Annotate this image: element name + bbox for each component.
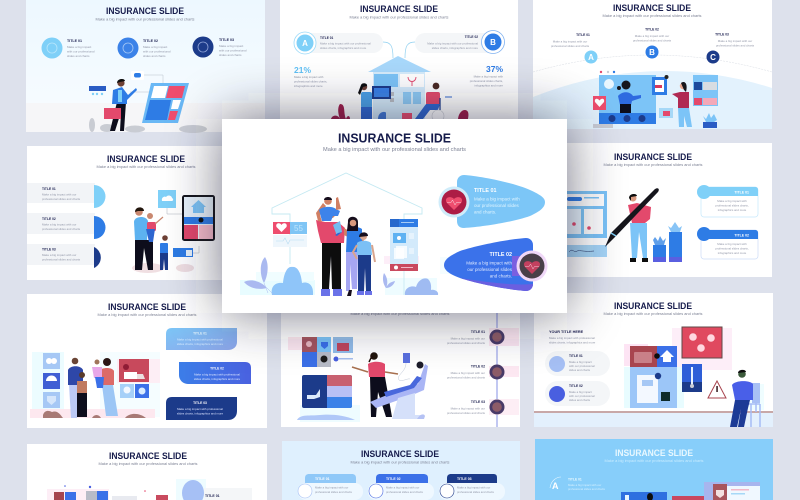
column 3: TITLE 03 — [457, 477, 472, 481]
tab 2: Make a big impact with our — [42, 222, 76, 226]
slide: bottom left, partial: INSURANCE SLIDE — [109, 451, 188, 462]
callout A — [294, 32, 383, 54]
tab 3 — [27, 244, 101, 268]
callout A: A — [302, 39, 308, 48]
slide: bottom right, partial: INSURANCE SLIDE — [615, 448, 694, 459]
item 1 — [42, 38, 95, 58]
marker B: B — [649, 48, 655, 57]
timeline — [489, 300, 519, 427]
marker A: professional slides and charts — [551, 44, 590, 48]
item 1: professional slides and charts — [447, 341, 486, 345]
illustration: patient and nurse — [288, 337, 428, 422]
item 3 — [192, 36, 247, 58]
marker A: A — [552, 481, 559, 491]
callout: title 02: and charts. — [490, 274, 512, 278]
callout: title 02: our professional slides — [467, 267, 513, 272]
slide: bottom centre, partial — [282, 441, 520, 500]
stat 37%: Make a big impact with — [474, 74, 503, 78]
tab 3: TITLE 03 — [42, 248, 56, 252]
house outline — [272, 173, 422, 264]
pill 3: TITLE 03 — [193, 401, 207, 405]
pill 3: Make a big impact with professional — [177, 407, 223, 411]
item 2: professional slides and charts — [447, 376, 486, 380]
item 2: with our professional — [569, 394, 595, 398]
slide: top left, three circles: INSURANCE SLIDE — [106, 6, 185, 17]
callout B — [415, 30, 504, 54]
slide: top centre, A and B with house: Make a big impact with our professional slides and charts — [350, 14, 449, 20]
callout: title 01: and charts. — [474, 210, 496, 214]
callout: title 02: Make a big impact with — [466, 260, 512, 266]
stat 21%: 21% — [294, 65, 311, 75]
item 2: TITLE 02 — [471, 364, 485, 368]
pill 3: slides charts, infographics and more — [177, 412, 224, 416]
marker A: professional slides and charts — [568, 487, 605, 491]
slide: middle left, three tabs: Make a big impact with our professional slides and charts — [96, 164, 196, 169]
callout: title 01: Make a big impact with — [474, 196, 520, 202]
item 2 — [447, 364, 486, 380]
column 1: professional slides and charts — [315, 490, 352, 494]
callout: title 02 — [444, 238, 548, 291]
callout B: slides charts, infographics and more — [432, 46, 478, 50]
card 2: infographics and more — [718, 251, 747, 255]
marker C: professional slides and charts — [716, 44, 755, 48]
item: TITLE 01 — [205, 494, 220, 498]
item 3: with our professional — [219, 48, 247, 52]
item 2: slides and charts — [143, 54, 166, 58]
tab 3: Make a big impact with our — [42, 253, 76, 257]
stat 21% — [294, 65, 327, 88]
item 3: TITLE 03 — [471, 400, 485, 404]
callout A: Make a big impact with our professional — [320, 42, 371, 46]
tab 3: professional slides and charts — [42, 258, 81, 262]
stat 37%: 37% — [486, 64, 503, 74]
item 1: TITLE 01 — [471, 330, 485, 334]
slide: lower right, your title here: INSURANCE SLIDE — [614, 301, 693, 312]
item 1: slides and charts — [569, 368, 591, 372]
slide: bottom right, partial: Make a big impact with our professional slides and charts — [604, 458, 704, 463]
card 1 — [697, 185, 758, 217]
intro text: slides charts, infographics and more — [549, 340, 596, 344]
centre slide: insurance family — [222, 119, 567, 313]
marker A — [550, 477, 605, 491]
item 1: TITLE 01 — [569, 354, 583, 358]
callout B: B — [490, 38, 496, 47]
item 2: Make a big impact with our — [451, 371, 485, 375]
heart rate card — [273, 222, 307, 247]
column 3 — [439, 474, 505, 500]
illustration: virus monitor and patient — [624, 327, 764, 427]
slide: top right, A B C arc: INSURANCE SLIDE — [613, 3, 692, 14]
item 1: Make a big impact — [569, 360, 592, 364]
item 2: TITLE 02 — [569, 384, 583, 388]
column 2: professional slides and charts — [386, 490, 423, 494]
illustration: family with tablet — [132, 190, 215, 273]
column 2: Make a big impact with our — [386, 486, 419, 490]
callout: title 01: TITLE 01 — [474, 188, 496, 194]
marker A: Make a big impact with our — [553, 40, 587, 44]
marker A: A — [588, 53, 594, 62]
illustration: screen and shield — [621, 482, 760, 500]
illustration: family — [316, 197, 375, 296]
item 3: slides and charts — [219, 53, 242, 57]
callout: title 01: our professional slides — [474, 203, 520, 208]
item 2: with our professional — [143, 50, 171, 54]
tab 1: Make a big impact with our — [42, 192, 76, 196]
stat 21%: infographics and more — [294, 84, 323, 88]
card 2 — [697, 227, 758, 259]
slide: bottom right, partial — [535, 439, 773, 500]
item 1: with our professional — [67, 50, 95, 54]
column 2 — [368, 474, 434, 500]
item 2: TITLE 02 — [143, 39, 158, 43]
callout A: TITLE 01 — [320, 36, 334, 40]
slide: middle right, pen and bars: Make a big impact with our professional slides and charts — [604, 162, 703, 167]
slide: middle left, three tabs: INSURANCE SLIDE — [107, 154, 186, 165]
centre slide shadow — [222, 119, 567, 313]
column 3: Make a big impact with our — [457, 486, 490, 490]
pill 1: slides charts, infographics and more — [177, 342, 224, 346]
illustration: document and pen — [567, 188, 682, 262]
column 2: TITLE 02 — [386, 477, 401, 481]
illustration: online consultation — [593, 71, 718, 128]
card 1: Make a big impact with — [717, 199, 747, 203]
item 3 — [447, 400, 486, 415]
callout: title 01 — [438, 175, 545, 228]
item 2: Make a big impact — [569, 390, 592, 394]
pill 2: slides charts, infographics and more — [194, 377, 241, 381]
marker B — [633, 28, 672, 58]
stat 37% — [470, 64, 503, 88]
item 2 — [118, 38, 171, 58]
marker A: Make a big impact with our — [568, 483, 601, 487]
child on shoulders — [319, 197, 342, 236]
plants — [244, 257, 438, 295]
chroma tint behind plants — [240, 256, 543, 295]
slide: lower right, your title here — [534, 293, 773, 427]
intro text: Make a big impact with professional — [549, 336, 595, 340]
pill 1: TITLE 01 — [193, 332, 207, 336]
slide: top left, three circles — [26, 0, 265, 133]
slide: lower right, your title here: Make a big impact with our professional slides and charts — [604, 311, 703, 316]
illustration: family with insurance icons — [30, 352, 160, 418]
item 2: Make a big impact — [143, 45, 168, 49]
tab 2: TITLE 02 — [42, 217, 56, 221]
father — [316, 203, 364, 296]
slide: bottom left, partial — [27, 444, 267, 500]
slide: top centre, A and B with house — [280, 0, 518, 122]
item 3: Make a big impact — [219, 44, 244, 48]
pill 2 — [179, 362, 251, 384]
pill 2: Make a big impact with professional — [194, 372, 240, 376]
slide: lower left, three pills: INSURANCE SLIDE — [108, 302, 187, 313]
slide: lower centre, patient chair: Make a big impact with our professional slides and charts — [350, 311, 450, 316]
item 1: slides and charts — [67, 54, 90, 58]
child — [353, 232, 375, 295]
slide: middle left, three tabs — [27, 146, 265, 280]
item 3: professional slides and charts — [447, 411, 486, 415]
column 1 — [298, 474, 363, 500]
card 2: TITLE 02 — [734, 234, 749, 238]
item 1: Make a big impact with our — [451, 336, 485, 340]
marker C: TITLE 03 — [715, 32, 729, 36]
marker C: Make a big impact with our — [718, 39, 752, 43]
slide: middle right, pen and bars: INSURANCE SLIDE — [614, 152, 693, 163]
slide: top left, three circles: Make a big impact with our professional slides and charts — [96, 16, 195, 22]
illustration: businessman with tablet — [89, 71, 207, 133]
card 2: professional slides charts, — [715, 246, 749, 250]
stat 21%: professional slides charts, — [294, 80, 327, 84]
slide: bottom centre, partial: Make a big impact with our professional slides and charts — [350, 460, 450, 464]
pill 1 — [166, 328, 237, 350]
slide: top centre, A and B with house: INSURANCE SLIDE — [360, 4, 439, 15]
callout A: slides charts, infographics and more — [320, 46, 367, 50]
tab 2: professional slides and charts — [42, 227, 81, 231]
stat 37%: infographics and more — [474, 84, 503, 88]
pill 1: Make a big impact with professional — [177, 338, 223, 342]
tab 1: TITLE 01 — [42, 187, 56, 191]
marker A: TITLE 01 — [576, 33, 590, 37]
item 1 — [447, 330, 486, 345]
marker C — [706, 32, 755, 64]
card 2: Make a big impact with — [717, 242, 747, 246]
callout: title 02: TITLE 02 — [490, 252, 512, 258]
illustration: icons and hand — [47, 479, 252, 500]
pill 3 — [166, 397, 237, 420]
slide: lower centre, patient chair — [281, 300, 520, 427]
slide: top right, A B C arc: Make a big impact with our professional slides and charts — [602, 13, 702, 18]
tab 1 — [27, 183, 106, 208]
marker B: TITLE 02 — [645, 28, 659, 32]
intro text: YOUR TITLE HERE — [549, 330, 584, 334]
tab 1: professional slides and charts — [42, 197, 81, 201]
stat 37%: professional slides charts, — [470, 79, 503, 83]
marker A: TITLE 01 — [568, 478, 582, 482]
slide: lower left, three pills: Make a big impact with our professional slides and charts — [98, 312, 197, 317]
slide: bottom left, partial: Make a big impact with our professional slides and charts — [98, 461, 198, 466]
slide: middle right, pen and bars — [527, 143, 772, 277]
item 2: slides and charts — [569, 398, 591, 402]
column 1: TITLE 01 — [315, 477, 330, 481]
slide: top right, A B C arc — [533, 0, 772, 129]
item 3: Make a big impact with our — [451, 406, 485, 410]
connectors — [383, 42, 415, 58]
card 1: infographics and more — [718, 208, 747, 212]
card 1: professional slides charts, — [715, 204, 749, 208]
item 1: Make a big impact — [67, 45, 92, 49]
marker A — [551, 33, 598, 64]
illustration: clinic house — [331, 56, 468, 122]
callout B: TITLE 02 — [465, 35, 478, 39]
slide: bottom centre, partial: INSURANCE SLIDE — [361, 449, 440, 460]
pill 2: TITLE 02 — [210, 366, 224, 370]
item 1: with our professional — [569, 364, 595, 368]
icon: tablet — [390, 219, 418, 295]
marker C: C — [710, 53, 716, 62]
intro text — [549, 330, 596, 344]
heart rate card: 55 — [294, 224, 303, 233]
item 1: TITLE 01 — [67, 39, 82, 43]
item 3: TITLE 03 — [219, 38, 234, 42]
subtitle: Make a big impact with our professional slides and charts — [323, 147, 466, 153]
callout B: Make a big impact with our professional — [427, 42, 478, 46]
title: INSURANCE SLIDE — [338, 130, 451, 146]
card 1: TITLE 01 — [734, 190, 749, 194]
marker B: Make a big impact with our — [635, 34, 669, 38]
item 1 — [545, 351, 610, 376]
slide: lower left, three pills — [27, 294, 267, 428]
item 2 — [545, 381, 610, 406]
column 3: professional slides and charts — [457, 490, 494, 494]
mother — [346, 217, 362, 296]
tab 2 — [27, 213, 106, 239]
stat 21%: Make a big impact with — [294, 75, 324, 79]
marker B: professional slides and charts — [633, 38, 672, 42]
column 1: Make a big impact with our — [315, 486, 348, 490]
